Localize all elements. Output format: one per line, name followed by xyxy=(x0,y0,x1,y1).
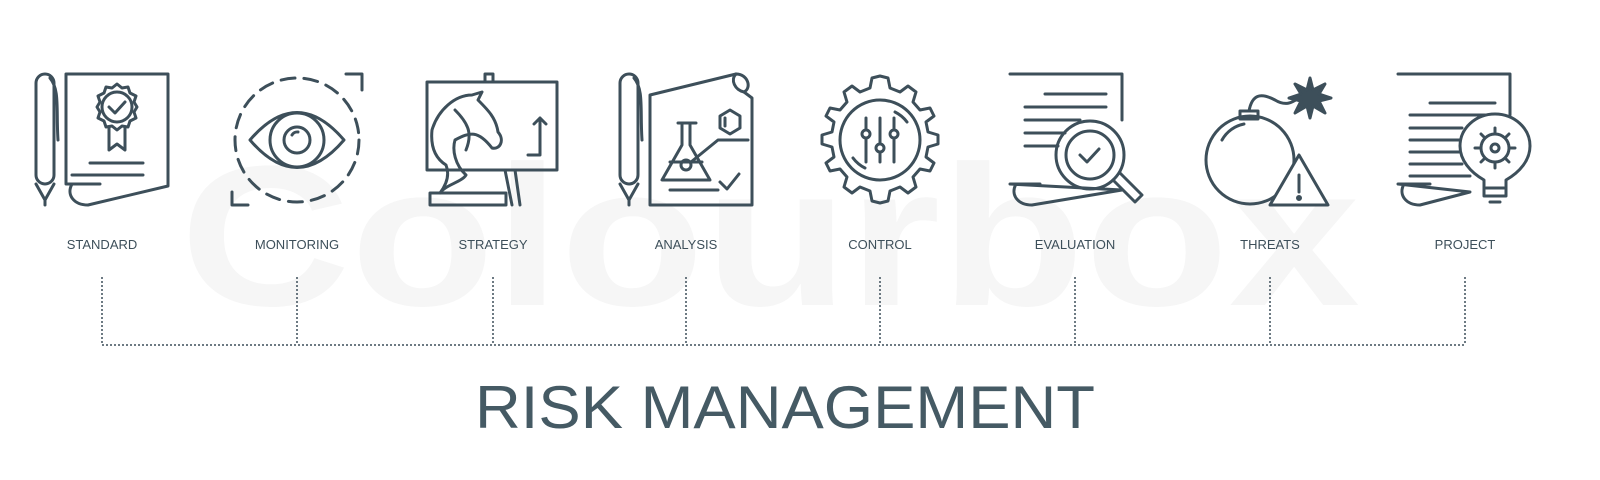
labels: THREATS xyxy=(1240,237,1300,252)
icon: analysis xyxy=(620,74,752,205)
icon: project xyxy=(1398,74,1530,205)
labels xyxy=(67,237,1495,252)
labels: ANALYSIS xyxy=(655,237,718,252)
labels: CONTROL xyxy=(848,237,912,252)
connector lines xyxy=(102,277,1465,345)
title: RISK MANAGEMENT xyxy=(475,374,1095,441)
labels: STRATEGY xyxy=(458,237,528,252)
labels: MONITORING xyxy=(255,237,339,252)
icon: strategy xyxy=(427,74,557,205)
labels: STANDARD xyxy=(67,237,137,252)
icon: control xyxy=(822,76,938,203)
icon: standard xyxy=(36,74,168,205)
watermark: Colourbox xyxy=(180,125,1360,348)
labels: PROJECT xyxy=(1435,237,1495,252)
labels: EVALUATION xyxy=(1035,237,1115,252)
icon: evaluation xyxy=(1010,74,1142,205)
icon: monitoring xyxy=(232,74,362,205)
icon: threats xyxy=(1206,78,1331,205)
